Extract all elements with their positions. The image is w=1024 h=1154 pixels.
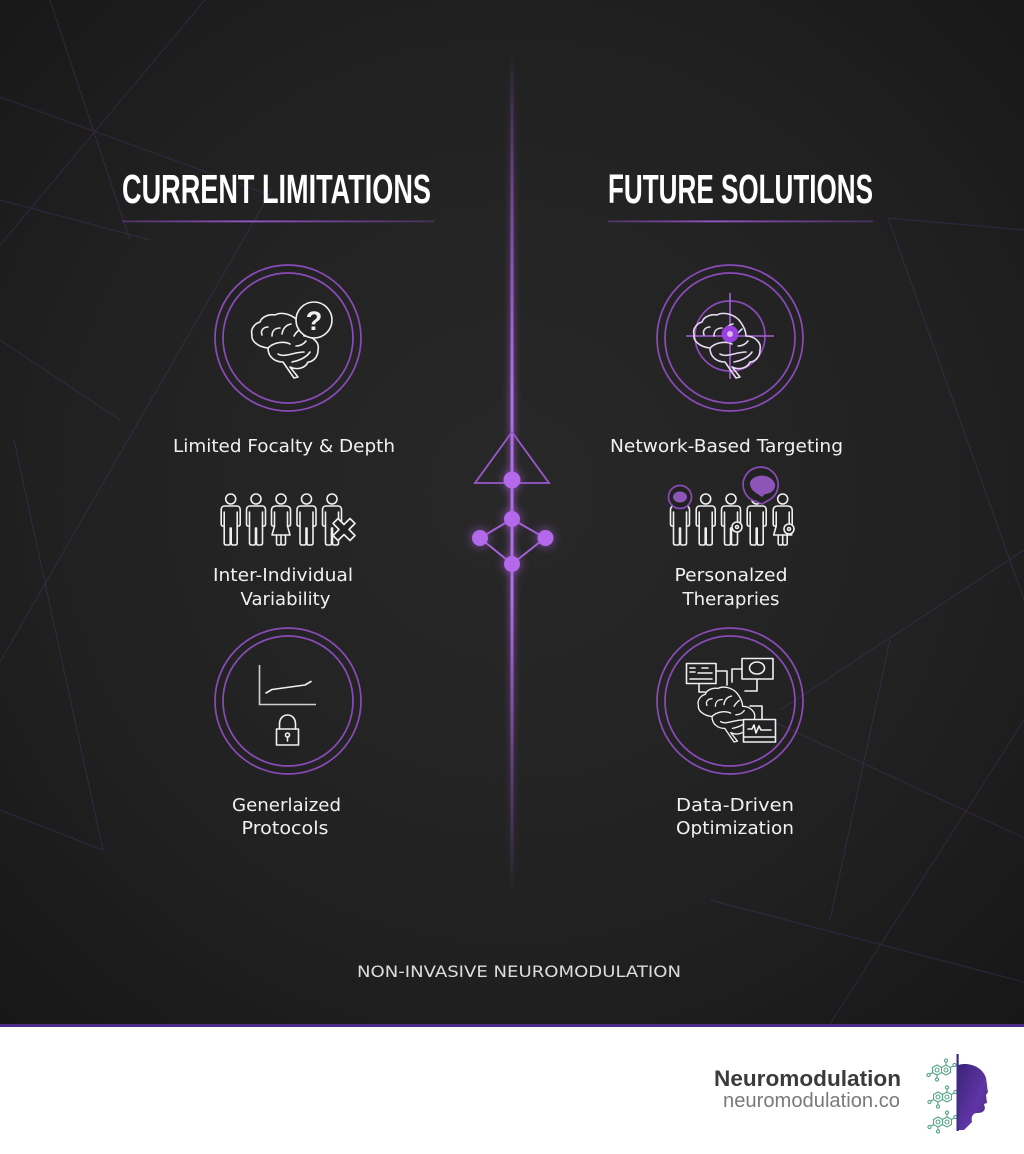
logo: molecule and face bbox=[927, 1054, 988, 1133]
label: inter-individual variability: Inter-Individual bbox=[213, 565, 353, 586]
label: data-driven optimization bbox=[676, 795, 794, 839]
label: limited focalty and depth: Limited Focalty & Depth bbox=[173, 436, 395, 457]
icon: people with personalized brains bbox=[668, 467, 794, 545]
center divider line bbox=[508, 50, 516, 895]
caption: NON-INVASIVE NEUROMODULATION bbox=[357, 962, 681, 981]
label: generalized protocols: Generlaized bbox=[232, 795, 341, 816]
icon: flat chart and padlock bbox=[215, 628, 361, 774]
icon: brain linked to data screens bbox=[657, 628, 803, 774]
title: future solutions: FUTURE SOLUTIONS bbox=[608, 166, 873, 212]
icon: targeted brain bbox=[657, 265, 803, 411]
label: personalized therapies: Personalzed bbox=[674, 565, 788, 586]
label: generalized protocols: Protocols bbox=[242, 818, 328, 839]
brand url: neuromodulation.co bbox=[723, 1090, 900, 1112]
label: network-based targeting: Network-Based Targeting bbox=[610, 436, 843, 457]
icon: brain with question mark bbox=[215, 265, 361, 411]
icon: brain with question mark: ? bbox=[306, 306, 322, 336]
label: personalized therapies bbox=[674, 565, 788, 610]
footer panel bbox=[0, 1024, 1024, 1154]
icon: people with one crossed out bbox=[221, 494, 355, 545]
label: data-driven optimization: Optimization bbox=[676, 818, 794, 839]
label: data-driven optimization: Data-Driven bbox=[676, 795, 794, 816]
label: generalized protocols bbox=[232, 795, 341, 839]
central network icon bbox=[471, 432, 554, 573]
label: inter-individual variability bbox=[213, 565, 353, 610]
brand name: Neuromodulation bbox=[714, 1066, 901, 1091]
title: current limitations: CURRENT LIMITATIONS bbox=[122, 166, 431, 212]
label: personalized therapies: Therapries bbox=[681, 589, 780, 610]
label: inter-individual variability: Variability bbox=[240, 589, 331, 610]
